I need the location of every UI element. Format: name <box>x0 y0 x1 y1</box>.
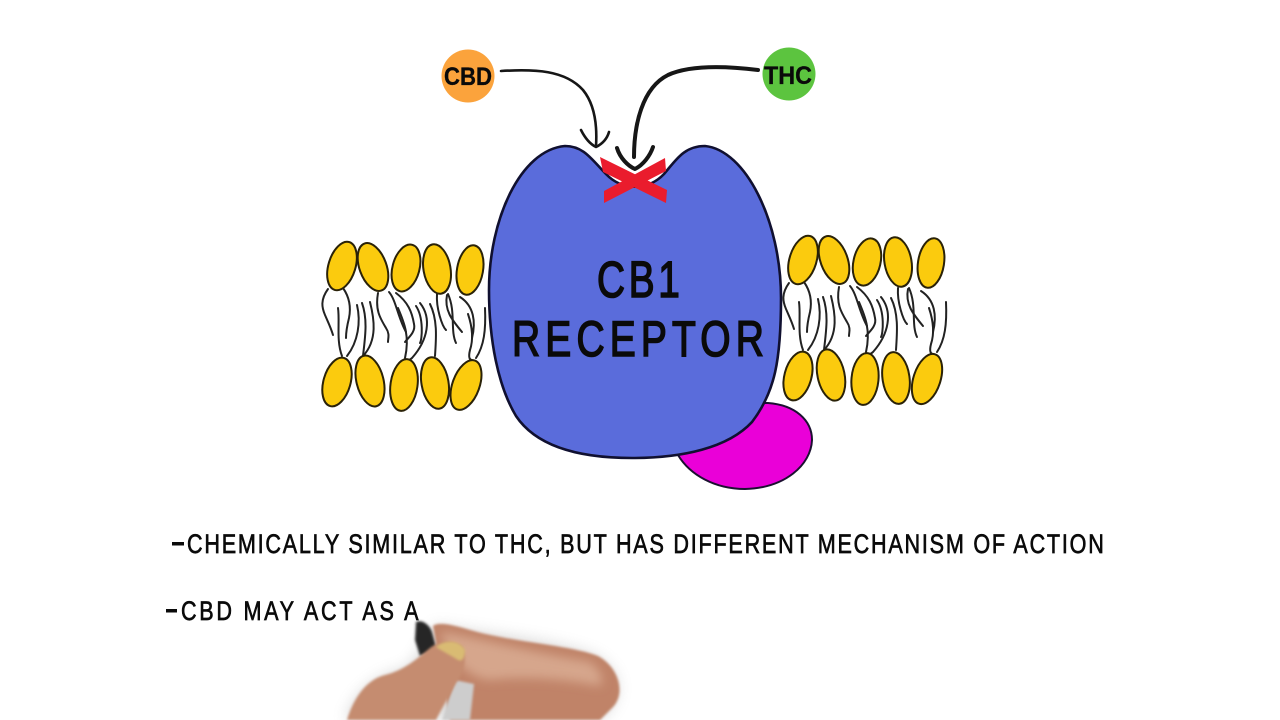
THC molecule: THC <box>764 62 812 90</box>
membrane: right phospholipids <box>778 232 948 408</box>
lipid tails: left <box>322 288 485 360</box>
CB1 receptor body <box>489 146 781 458</box>
marker tip <box>415 621 437 656</box>
palm <box>433 624 620 720</box>
magenta G-protein blob <box>678 403 812 489</box>
text: CBD partial line: CBD MAY ACT AS A <box>181 597 419 627</box>
lipid heads: right <box>778 232 948 408</box>
THC molecule <box>762 48 816 100</box>
thumb <box>347 642 465 720</box>
thumbnail <box>436 642 465 661</box>
CB1 receptor label: CB1 <box>597 251 680 308</box>
arrow: THC to receptor <box>617 67 758 169</box>
lipid tails: right <box>783 282 946 354</box>
CB1 receptor label <box>512 251 764 367</box>
CB1 receptor label: RECEPTOR <box>512 310 764 367</box>
lipid heads: left <box>317 238 488 414</box>
arrow: CBD to receptor <box>501 70 609 147</box>
membrane: left phospholipids <box>317 238 488 414</box>
CBD molecule <box>442 50 494 102</box>
text: mechanism line: CHEMICALLY SIMILAR TO THC, BUT HAS DIFFERENT MECHANISM OF ACTION <box>187 530 1104 560</box>
hand shadow <box>345 625 618 720</box>
red X block mark <box>600 157 667 203</box>
CBD molecule: CBD <box>444 63 492 91</box>
marker body <box>442 680 474 720</box>
index finger highlight <box>440 632 602 686</box>
drawing hand with marker <box>345 621 620 720</box>
